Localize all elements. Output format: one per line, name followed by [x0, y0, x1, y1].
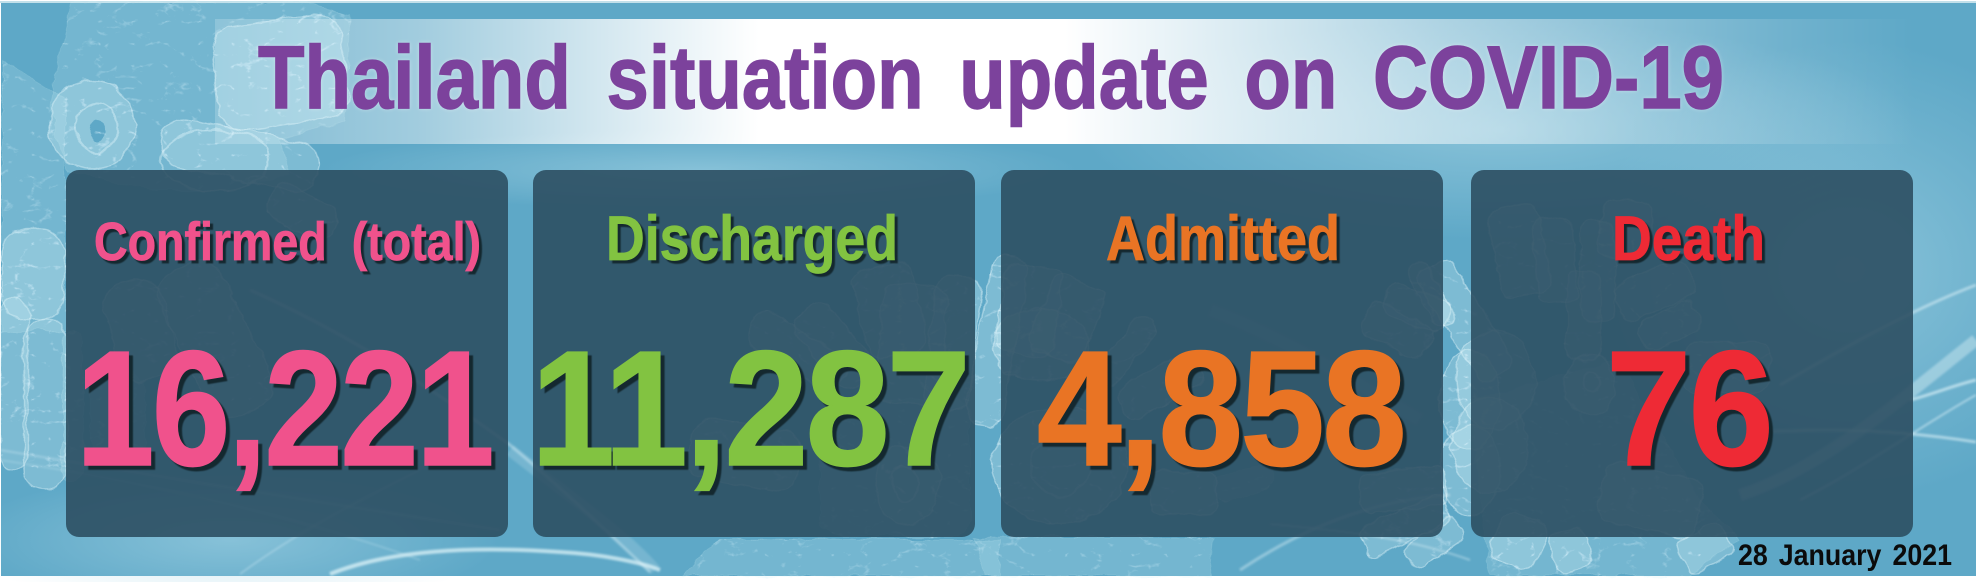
label: discharged: Discharged — [606, 204, 898, 274]
panel: admitted — [1001, 170, 1443, 537]
virus lobes through card one — [62, 330, 84, 480]
label: admitted: Admitted — [1106, 204, 1340, 274]
date: 28 January 2021 — [1738, 539, 1952, 572]
title band — [215, 19, 1915, 144]
label: death: Death — [1612, 204, 1765, 274]
number: confirmed: 16,221 — [76, 317, 492, 500]
label: confirmed: Confirmed (total) — [94, 212, 481, 272]
virus gap spikes — [1414, 254, 1516, 386]
panel: confirmed — [66, 170, 508, 537]
virus right spikes card four — [1470, 360, 1740, 576]
number: discharged: 11,287 — [531, 317, 968, 500]
virus center spikes card three — [975, 537, 1215, 576]
panel: death — [1471, 170, 1913, 537]
virus middle spikes card two — [680, 540, 1000, 576]
virus left lobes — [24, 320, 66, 490]
title: Thailand situation update on COVID-19 — [258, 27, 1724, 127]
virus top left body — [50, 2, 350, 190]
panel: discharged — [533, 170, 975, 537]
number: death: 76 — [1606, 317, 1771, 500]
flowing ribbons — [0, 285, 1976, 574]
number: admitted: 4,858 — [1037, 317, 1404, 500]
